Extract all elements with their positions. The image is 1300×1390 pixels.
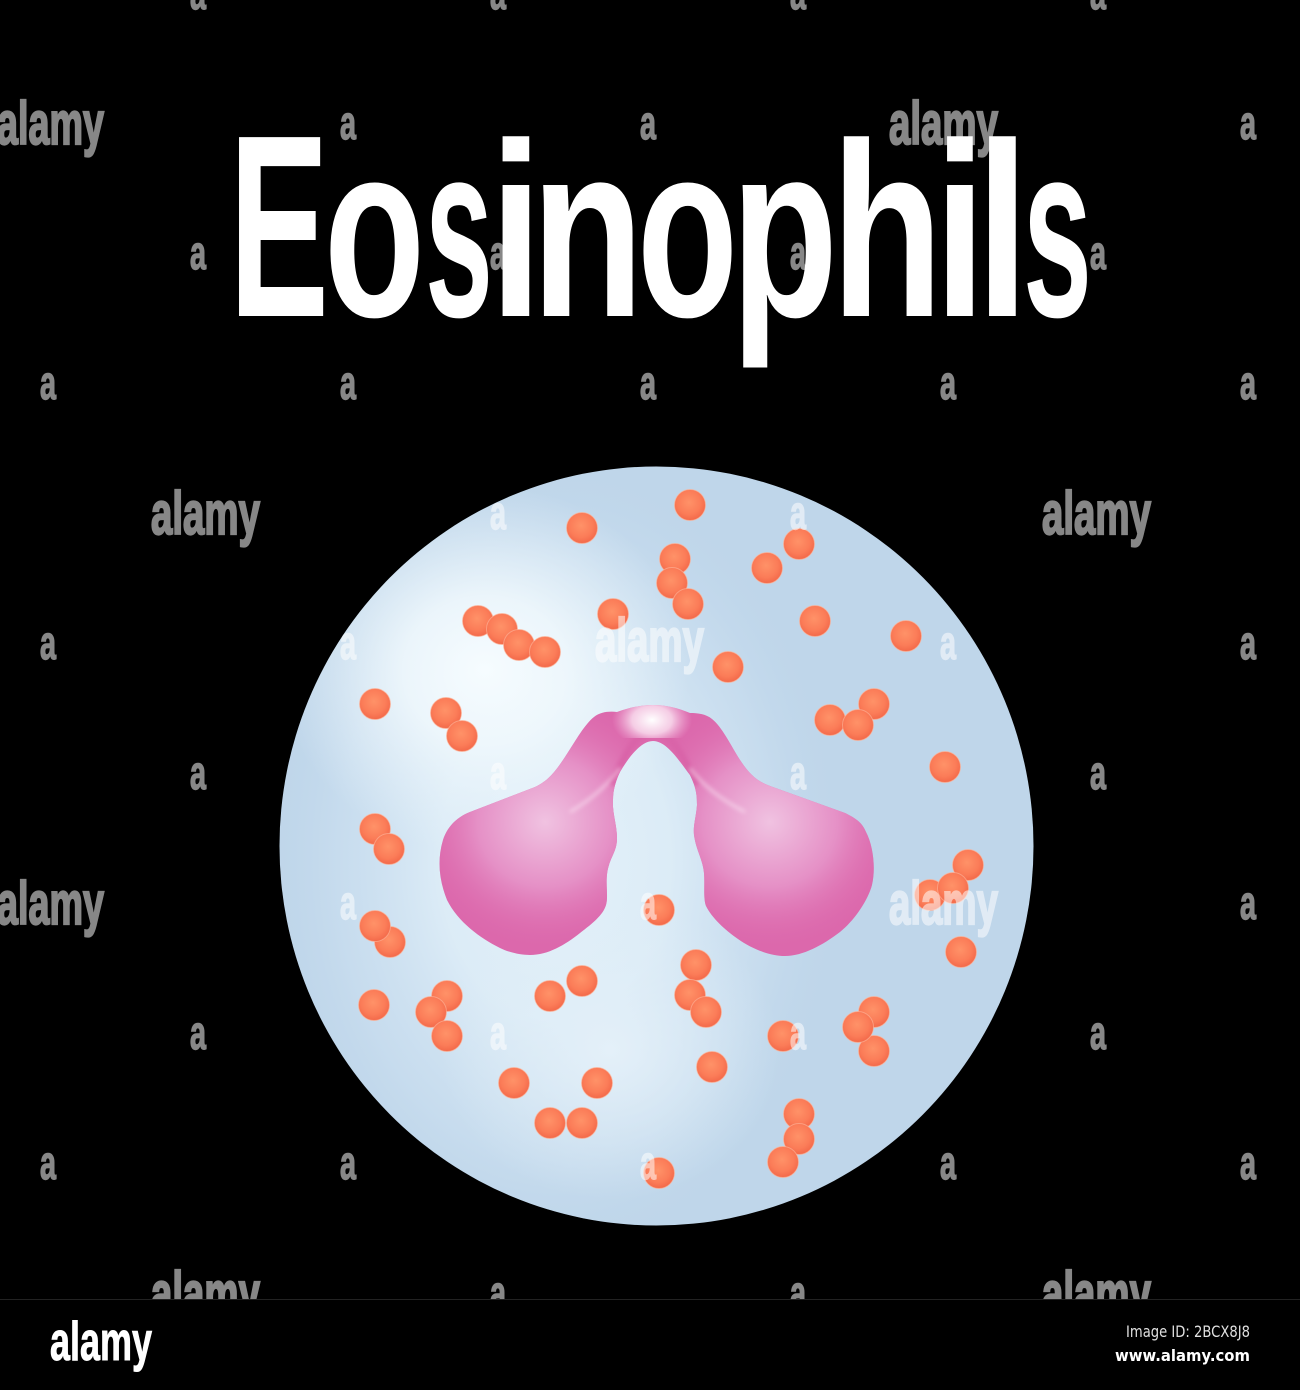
watermark overlay: alamy	[0, 90, 104, 157]
title: n	[531, 91, 644, 369]
watermark overlay: alamy	[1042, 1260, 1151, 1327]
image id: Image ID: 2BCX8J8	[1126, 1322, 1250, 1341]
watermark overlay: alamy	[889, 870, 998, 937]
website: www.alamy.com	[1115, 1346, 1250, 1365]
watermark overlay: a	[640, 96, 657, 149]
watermark overlay: a	[1090, 226, 1107, 279]
watermark overlay: a	[190, 226, 207, 279]
title: o	[637, 91, 738, 369]
watermark overlay: a	[940, 616, 957, 669]
watermark overlay: a	[340, 356, 357, 409]
title: p	[731, 91, 838, 369]
watermark overlay: a	[340, 616, 357, 669]
watermark overlay: a	[490, 746, 507, 799]
watermark overlay: a	[490, 226, 507, 279]
watermark overlay: a	[640, 356, 657, 409]
bilobed nucleus	[440, 705, 874, 956]
footer logo: alamy	[50, 1310, 152, 1372]
title: l	[976, 91, 1030, 369]
watermark overlay: a	[940, 1136, 957, 1189]
watermark overlay: a	[640, 876, 657, 929]
title: o	[324, 91, 425, 369]
title: E	[229, 82, 329, 372]
watermark overlay: alamy	[595, 607, 704, 674]
watermark overlay: a	[1240, 356, 1257, 409]
watermark overlay: a	[1240, 96, 1257, 149]
title: s	[425, 91, 493, 369]
watermark overlay: a	[340, 96, 357, 149]
watermark overlay: a	[490, 486, 507, 539]
title: h	[831, 91, 943, 369]
watermark overlay: a	[490, 1266, 507, 1319]
watermark overlay: a	[190, 1006, 207, 1059]
title: i	[489, 91, 543, 369]
watermark overlay: a	[790, 746, 807, 799]
watermark overlay: a	[940, 356, 957, 409]
footer bar	[0, 1299, 1300, 1390]
watermark overlay: a	[40, 1136, 57, 1189]
cell body	[280, 466, 1034, 1226]
watermark overlay: a	[1240, 1136, 1257, 1189]
watermark overlay: a	[340, 1136, 357, 1189]
watermark overlay: a	[490, 1006, 507, 1059]
title: s	[1023, 91, 1092, 369]
watermark overlay: alamy	[1042, 480, 1151, 547]
watermark overlay: a	[790, 226, 807, 279]
watermark overlay: a	[1090, 1006, 1107, 1059]
granules	[358, 490, 984, 1188]
watermark overlay: a	[790, 1006, 807, 1059]
watermark overlay: a	[40, 616, 57, 669]
watermark overlay: alamy	[889, 90, 998, 157]
watermark overlay: alamy	[151, 1260, 260, 1327]
watermark overlay: a	[790, 1266, 807, 1319]
watermark overlay: alamy	[0, 870, 104, 937]
watermark overlay: a	[40, 356, 57, 409]
eosinophil cell	[280, 466, 1034, 1226]
watermark overlay: a	[640, 1136, 657, 1189]
watermark overlay: a	[1090, 746, 1107, 799]
watermark overlay: a	[340, 876, 357, 929]
title: i	[934, 91, 986, 369]
watermark overlay: a	[790, 486, 807, 539]
watermark overlay: a	[1240, 876, 1257, 929]
watermark overlay: alamy	[151, 480, 260, 547]
watermark overlay: a	[190, 746, 207, 799]
watermark overlay: a	[1240, 616, 1257, 669]
